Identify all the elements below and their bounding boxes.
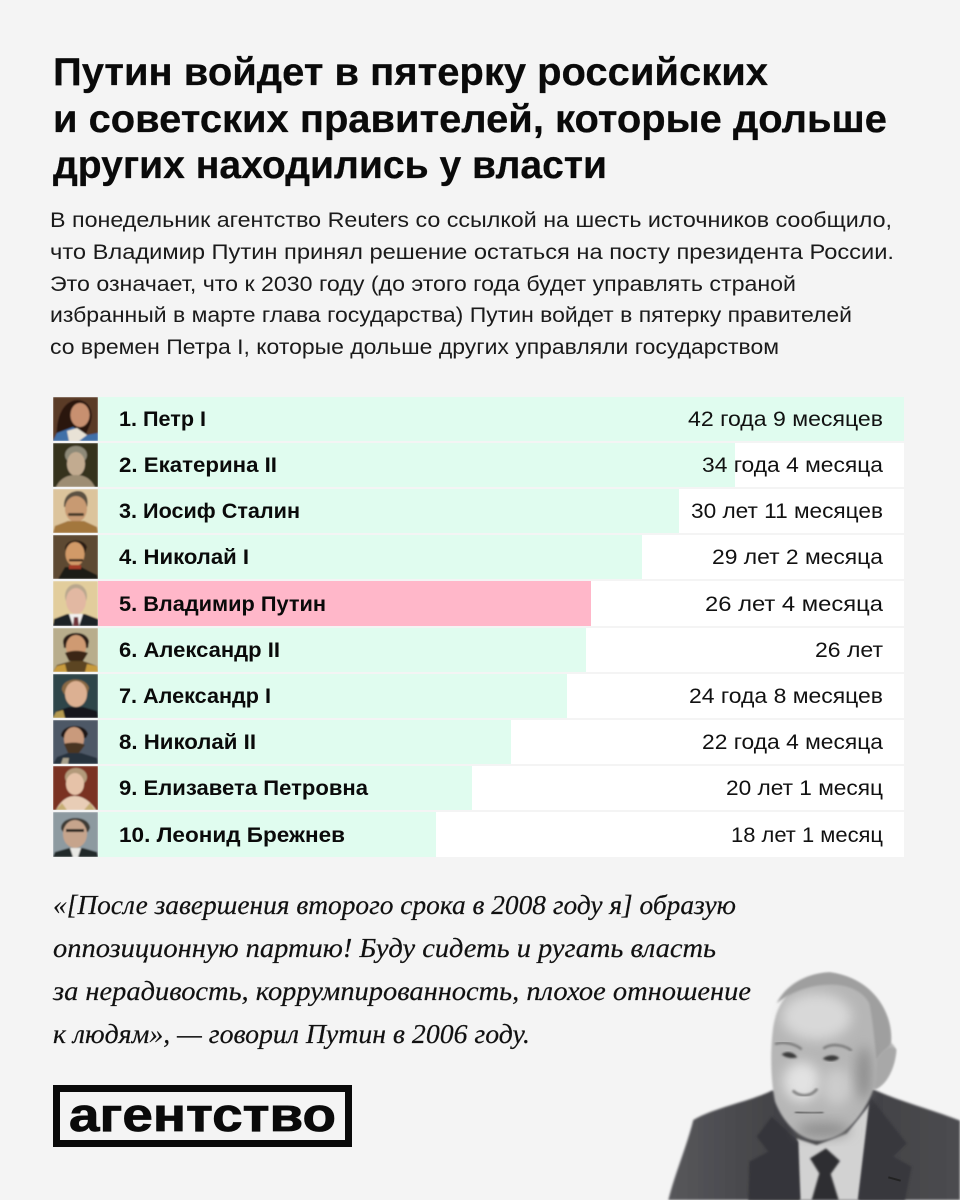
ranking chart [53, 397, 904, 857]
row 6: Александр II [53, 628, 904, 672]
jaw shadow [797, 1123, 850, 1137]
row 9: Елизавета Петровна: 9. Елизавета Петровна [119, 776, 369, 800]
row 7: Александр I: 24 года 8 месяцев [689, 684, 883, 708]
row 1: Петр I [53, 397, 904, 441]
nose and mouth [793, 1089, 817, 1095]
row 1: Петр I: 42 года 9 месяцев [688, 407, 883, 431]
quote: оппозиционную партию! Буду сидеть и ругать власть [53, 932, 716, 963]
cheek highlight [783, 1062, 820, 1102]
row 8: Николай II: 22 года 4 месяца [702, 730, 883, 754]
row 2: Екатерина II: 34 года 4 месяца [702, 453, 883, 477]
eyes [782, 1052, 839, 1061]
row 6: Александр II: 6. Александр II [119, 638, 280, 662]
ear [874, 1047, 896, 1089]
row 9: Елизавета Петровна [53, 766, 904, 810]
row 4: Николай I [53, 535, 904, 579]
row 8: Николай II: 8. Николай II [119, 730, 256, 754]
head [771, 973, 896, 1141]
row 3: Иосиф Сталин: 3. Иосиф Сталин [119, 499, 300, 523]
row 2: Екатерина II [53, 443, 904, 487]
title: Путин войдет в пятерку российских [53, 51, 768, 94]
intro text block: В понедельник агентство Reuters со ссылкой на шесть источников сообщило, [50, 208, 892, 232]
quote: «[После завершения второго срока в 2008 году я] образую [53, 889, 736, 920]
hair [777, 973, 891, 1060]
row 7: Александр I [53, 674, 904, 718]
logo: Агентство: агентство [69, 1088, 336, 1141]
intro text block: Это означает, что к 2030 году (до этого года будет управлять страной [50, 272, 796, 296]
quote: к людям», — говорил Путин в 2006 году. [53, 1018, 530, 1049]
row 10: Леонид Брежнев: 18 лет 1 месяц [731, 823, 883, 847]
tie [810, 1148, 840, 1200]
row 5: Владимир Путин (highlighted): 26 лет 4 месяца [705, 592, 883, 616]
intro text block: что Владимир Путин принял решение остаться на посту президента России. [50, 240, 894, 264]
brows [775, 1043, 852, 1051]
row 6: Александр II: 26 лет [815, 638, 883, 662]
forehead highlight [782, 993, 852, 1040]
row 7: Александр I: 7. Александр I [119, 684, 271, 708]
photo: Putin portrait in black and white [668, 973, 960, 1200]
row 5: Владимир Путин (highlighted) [53, 581, 904, 626]
shirt collar [797, 1103, 871, 1200]
row 3: Иосиф Сталин: 30 лет 11 месяцев [691, 499, 883, 523]
row 8: Николай II [53, 720, 904, 764]
intro text block [50, 208, 894, 359]
row 4: Николай I: 29 лет 2 месяца [712, 545, 883, 569]
row 4: Николай I: 4. Николай I [119, 545, 249, 569]
jacket pocket detail [888, 1177, 901, 1181]
title: других находились у власти [53, 144, 607, 187]
row 2: Екатерина II: 2. Екатерина II [119, 453, 277, 477]
right cheek [822, 1068, 852, 1105]
left lapel [748, 1117, 800, 1200]
title: и советских правителей, которые дольше [53, 98, 887, 141]
suit [668, 1089, 960, 1200]
row 10: Леонид Брежнев: 10. Леонид Брежнев [119, 823, 345, 847]
row 1: Петр I: 1. Петр I [119, 407, 206, 431]
row 5: Владимир Путин (highlighted): 5. Владимир Путин [119, 592, 326, 616]
title [53, 51, 887, 187]
row 3: Иосиф Сталин [53, 489, 904, 533]
temple shadow [857, 1047, 871, 1100]
quote [52, 889, 751, 1049]
intro text block: со времен Петра I, которые дольше других управляли государством [50, 335, 779, 359]
right lapel [858, 1097, 912, 1200]
intro text block: избранный в марте глава государства) Путин войдет в пятерку правителей [50, 303, 852, 327]
quote: за нерадивость, коррумпированность, плохое отношение [52, 975, 751, 1006]
row 9: Елизавета Петровна: 20 лет 1 месяц [726, 776, 883, 800]
row 10: Леонид Брежнев [53, 812, 904, 857]
